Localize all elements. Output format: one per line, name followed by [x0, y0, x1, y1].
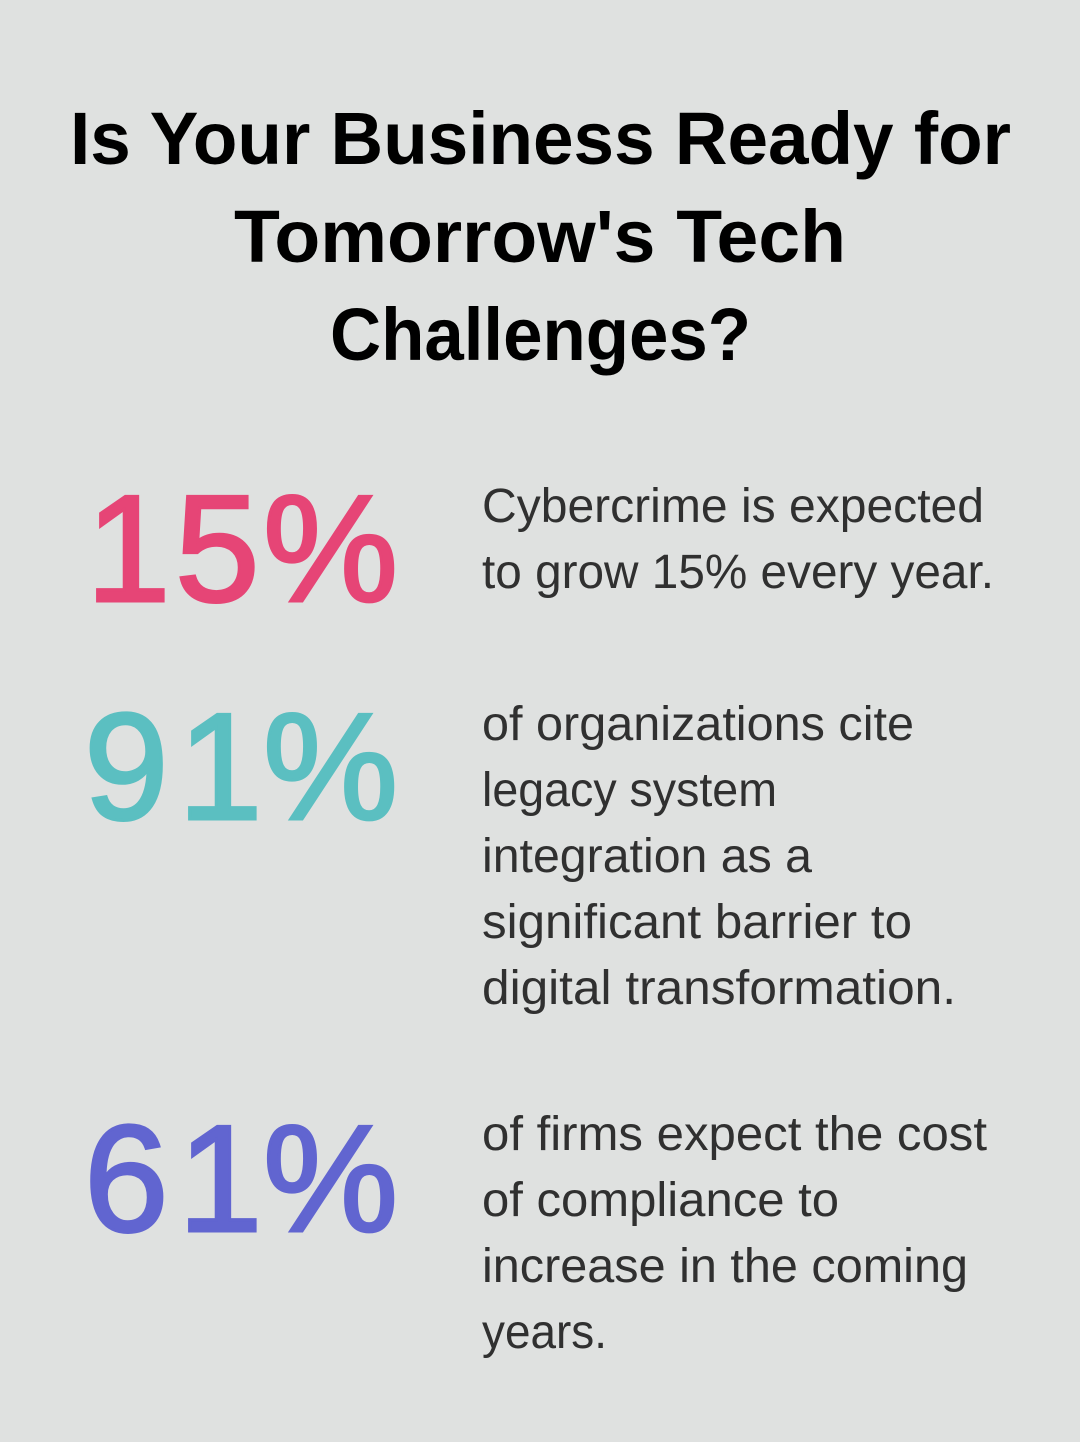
text: legacy systems: integration as a [482, 830, 812, 883]
text: compliance: of firms expect the cost [482, 1108, 987, 1161]
text: compliance [482, 1108, 987, 1359]
text: legacy systems: of organizations cite [482, 698, 914, 751]
text: compliance: years. [482, 1306, 607, 1359]
statistic: 91%: 91% [84, 682, 398, 852]
text: compliance: of compliance to [482, 1174, 839, 1227]
title: Tomorrow's Tech [234, 195, 846, 278]
text: legacy systems: legacy system [482, 764, 777, 817]
text: compliance: increase in the coming [482, 1240, 968, 1293]
text: cybercrime: Cybercrime is expected [482, 480, 984, 533]
title [70, 97, 1011, 376]
text: legacy systems [482, 698, 956, 1015]
text: cybercrime: to grow 15% every year. [482, 546, 994, 599]
text: cybercrime [482, 480, 994, 599]
title: Challenges? [330, 293, 751, 376]
text: legacy systems: digital transformation. [482, 962, 956, 1015]
title: Is Your Business Ready for [70, 97, 1011, 180]
statistic: 61%: 61% [84, 1094, 398, 1264]
statistic: 15%: 15% [86, 464, 398, 634]
text: legacy systems: significant barrier to [482, 896, 912, 949]
